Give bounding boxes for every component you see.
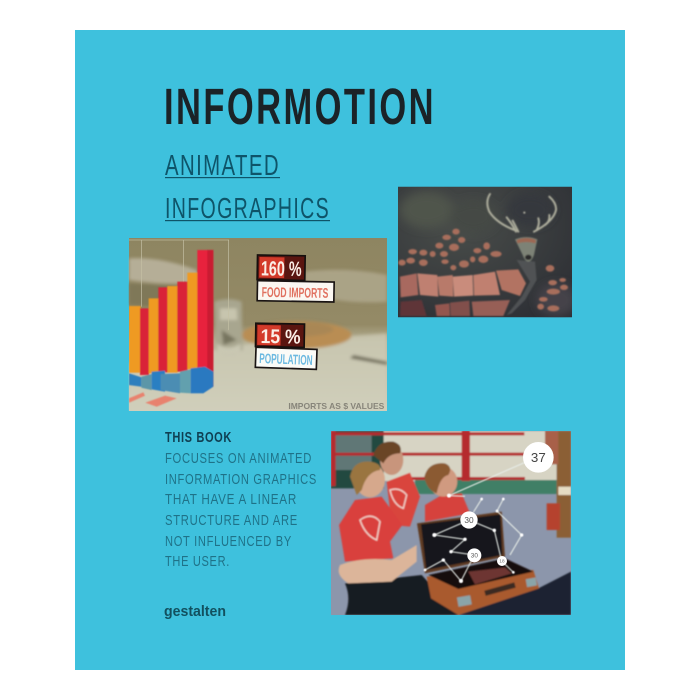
node: 18: [497, 556, 507, 566]
boxing ring ropes: [331, 431, 525, 486]
left child: [339, 497, 402, 562]
leaves: [398, 229, 568, 311]
caption: IMPORTS AS $ VALUES: [288, 401, 385, 411]
subtitle: INFOGRAPHICS: [165, 193, 330, 225]
label: 160 %: 160 %: [261, 257, 302, 281]
middle child: [387, 473, 420, 527]
text block: this book: THE USER.: [165, 554, 230, 570]
background shapes: [129, 258, 387, 411]
photo: children with suitcase data graphic: [331, 431, 571, 615]
bars: [129, 250, 213, 407]
shelf on right: [557, 431, 571, 538]
label: 15 %: 15 %: [260, 326, 301, 349]
data network lines: [425, 462, 525, 581]
node: 30 small: 30: [471, 553, 478, 560]
body segments: [398, 194, 568, 316]
label: food imports: [257, 281, 334, 302]
data network nodes: [424, 494, 523, 583]
text block: this book: [165, 430, 317, 570]
floor labels: [129, 392, 145, 403]
book cover background: [75, 30, 625, 670]
subtitle: ANIMATED: [165, 150, 280, 182]
stag neck: [507, 260, 537, 315]
node: 30 small: [467, 548, 481, 562]
photo: stag illustration: [398, 187, 577, 317]
title: INFORMOTION: [164, 78, 436, 135]
node: 37: 37: [531, 450, 546, 465]
chart grid frame: [129, 240, 229, 330]
photo: bar chart over dining table: [129, 238, 387, 411]
antlers: [487, 194, 556, 232]
text block: this book: STRUCTURE AND ARE: [165, 513, 298, 529]
text block: this book: FOCUSES ON ANIMATED: [165, 451, 312, 467]
gym wall: [383, 431, 557, 481]
stag head: [515, 237, 537, 262]
right child: [425, 493, 470, 522]
text block: this book: THAT HAVE A LINEAR: [165, 492, 297, 508]
text block: this book: THIS BOOK: [165, 430, 232, 446]
node: 18: 18: [499, 559, 505, 564]
suitcase: [427, 570, 539, 615]
subtitle: [165, 150, 330, 225]
text block: this book: NOT INFLUENCED BY: [165, 534, 292, 550]
label: 160 %: [257, 255, 305, 281]
node: 37: [523, 442, 554, 473]
node: 30: 30: [464, 515, 474, 525]
publisher logo: gestalten: [164, 603, 226, 620]
label: food imports: FOOD IMPORTS: [262, 284, 328, 301]
dark mat: [345, 575, 458, 615]
node: 30: [460, 511, 478, 529]
text block: this book: INFORMATION GRAPHICS: [165, 472, 317, 488]
blue bars: [129, 373, 141, 387]
label: population: [255, 347, 317, 369]
label: population: POPULATION: [259, 350, 313, 368]
